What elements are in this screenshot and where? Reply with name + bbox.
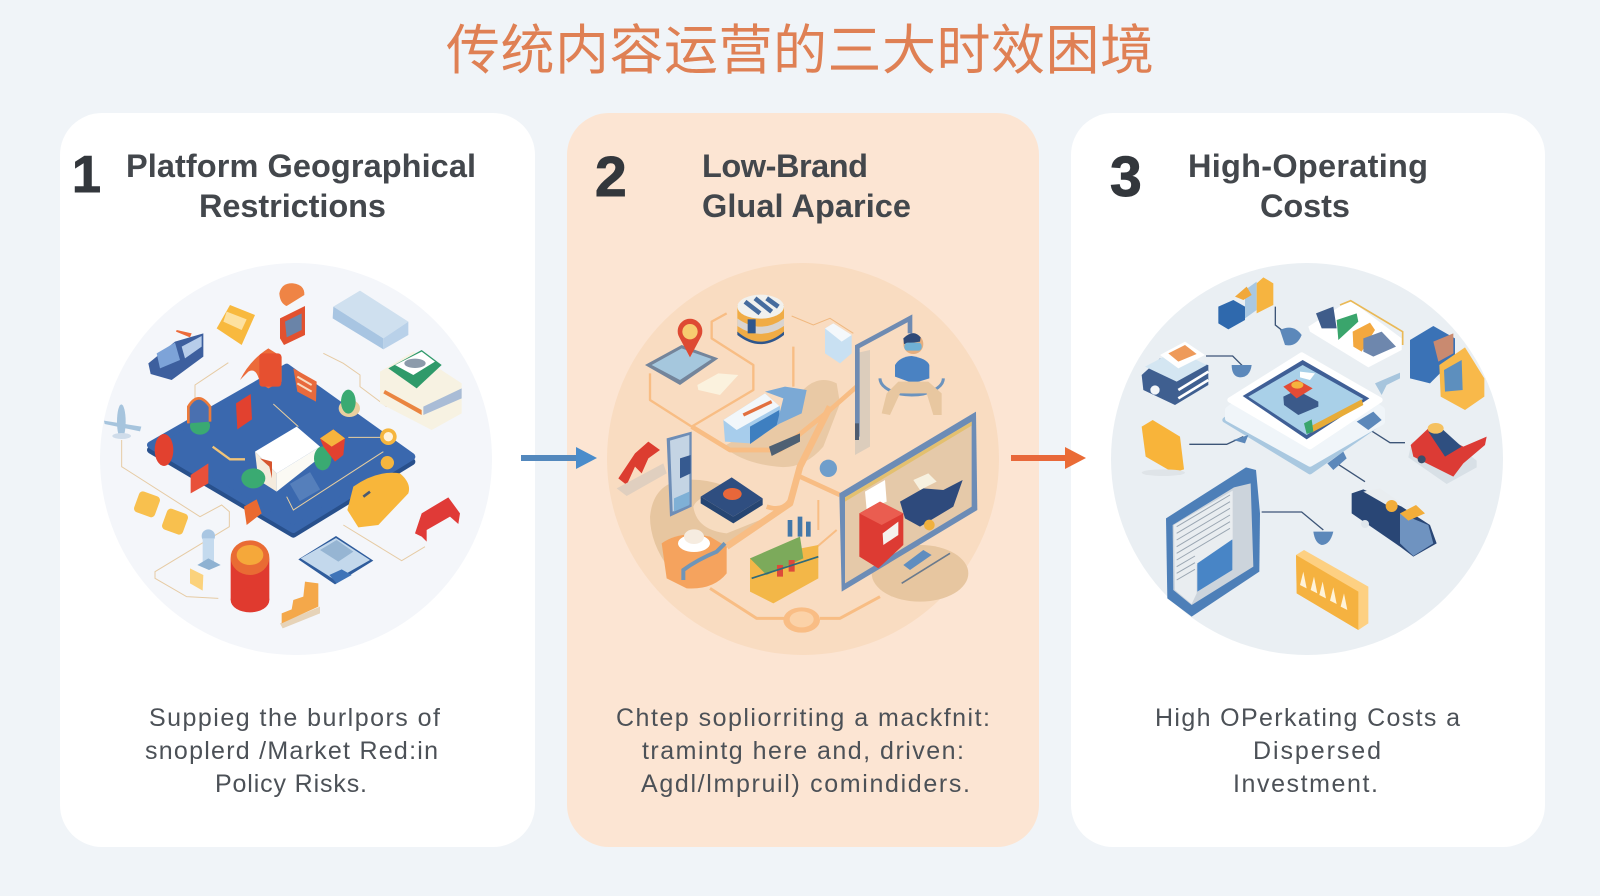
description 1 [145,704,440,798]
description 1: snoplerd /Market Red:in [145,737,438,765]
heading 1: Platform Geographical [126,148,476,184]
heading 3 [1188,148,1428,224]
icon: striped barrel [737,295,784,344]
description 1: Policy Risks. [215,770,367,798]
description 2: tramintg here and, driven: [642,737,964,765]
description 2 [616,704,990,798]
icon: orange bell pot [662,529,727,588]
icon: van stack [1142,342,1208,405]
description 1: Suppieg the burlpors of [149,704,440,732]
heading 3: High-Operating [1188,148,1428,184]
number 1: 1 [72,146,101,204]
icon: orange tag and red phone [279,283,305,345]
icon: central device [1225,355,1382,472]
icon: navy truck [1352,488,1437,557]
icon: keyboard block [333,291,408,349]
illustration: logistics platform [100,263,492,655]
icon: red vehicle [1408,423,1487,484]
heading 1: Restrictions [199,188,386,224]
icon: cream stack [380,350,462,430]
heading 3: Costs [1260,188,1350,224]
number 3: 3 [1110,145,1142,209]
icon: smartphone [667,432,692,517]
icon: yellow rack [1296,550,1368,630]
title: 传统内容运营的三大时效困境 [446,21,1154,81]
description 3 [1155,704,1460,798]
connector plugs [1232,328,1400,545]
description 3: Investment. [1233,770,1378,798]
icon: document panel [1166,467,1260,617]
heading 2 [702,148,911,224]
icon: red clamp [415,497,460,542]
illustration: central hub [1111,263,1503,655]
icon: monitor [839,412,977,592]
panel: platform geographical restrictions [60,113,535,847]
icon: map tablet with pin [645,319,738,395]
icon: red cylinder [231,540,269,612]
icon: red bull [618,442,660,485]
arrow: blue [521,447,597,469]
panel: high operating costs [1071,113,1545,847]
icon: tray of folders [1308,300,1403,367]
icon: chip [298,536,373,584]
icon: person with headset [880,333,943,415]
description 3: High OPerkating Costs a [1155,704,1460,732]
panel: low-brand visual appearance [567,113,1039,847]
illustration: brand network [607,263,999,655]
icon: blue and yellow blocks [1218,277,1273,329]
icon: blue box and shirt [723,387,807,456]
icon: door frame and column [855,318,910,455]
icon: yellow cube [1142,420,1185,476]
description 2: Chtep sopliorriting a mackfnit: [616,704,990,732]
icon: yellow card [190,568,203,591]
icon: yellow box [217,305,255,345]
icon: van [148,330,203,380]
description 3: Dispersed [1253,737,1381,765]
heading 1 [126,148,476,224]
number 2: 2 [595,145,627,209]
heading 2: Glual Aparice [702,188,911,224]
icon: orange bars [280,582,320,628]
icon: pencil holder [750,517,818,603]
icon: server block [825,323,852,363]
icon: plane [104,404,141,439]
icon: yellow piggy bank [347,473,409,527]
description 2: Agdl/lmpruil) comindiders. [641,770,970,798]
icon: currency blocks [133,490,189,536]
heading 2: Low-Brand [702,148,868,184]
icon: server cabinet and yellow machine [1410,326,1484,410]
icon: pillar [197,529,221,570]
arrow: orange [1011,447,1086,469]
icon: dark square button [701,477,763,523]
